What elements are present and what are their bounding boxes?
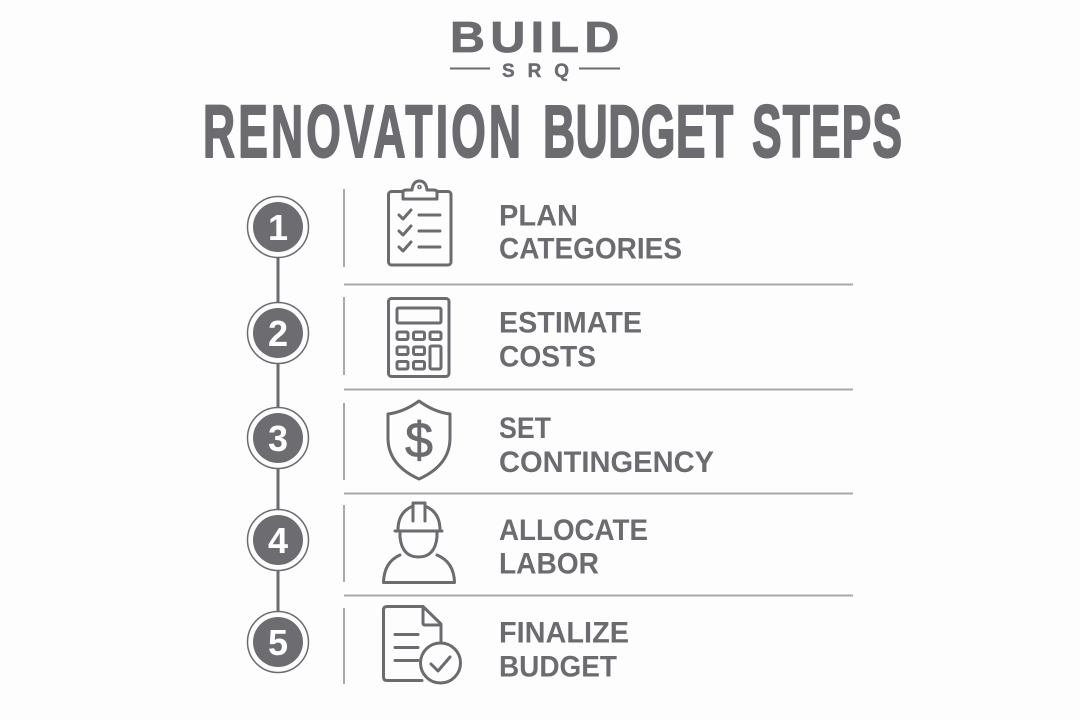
timeline connector bbox=[276, 256, 280, 614]
icon: calculator bbox=[388, 298, 449, 376]
step 4 label: ALLOCATE bbox=[499, 514, 648, 547]
icon: document with check bbox=[384, 606, 460, 683]
step 1 label: PLAN bbox=[499, 200, 578, 232]
step 1 number badge: 1 bbox=[268, 207, 288, 248]
step 3 number badge: 3 bbox=[268, 418, 288, 459]
step 2 number badge: 2 bbox=[268, 313, 288, 354]
step 4 number badge bbox=[248, 510, 308, 570]
step 2 label bbox=[499, 306, 642, 374]
step 5 label: BUDGET bbox=[499, 650, 617, 684]
step 5 label bbox=[499, 616, 629, 684]
step 5 label: FINALIZE bbox=[499, 616, 629, 650]
step 2 label: ESTIMATE bbox=[499, 306, 642, 340]
step 3 label: CONTINGENCY bbox=[499, 446, 714, 479]
icon: shield with dollar: $ bbox=[405, 412, 433, 468]
step 1 label: CATEGORIES bbox=[499, 232, 682, 266]
step 2 label: COSTS bbox=[499, 340, 596, 374]
step 4 label bbox=[499, 514, 648, 580]
title bbox=[203, 90, 902, 173]
icon: construction worker bbox=[384, 503, 454, 582]
step 1 number badge bbox=[248, 196, 308, 258]
icon: clipboard checklist bbox=[388, 181, 451, 265]
logo: Build SRQ: SRQ bbox=[502, 61, 569, 82]
step 4 label: LABOR bbox=[499, 548, 599, 580]
step 2 number badge bbox=[248, 302, 308, 364]
icon: shield with dollar bbox=[388, 401, 450, 479]
step 3 label: SET bbox=[499, 412, 551, 445]
step 1 label bbox=[499, 200, 682, 266]
title: BUDGET bbox=[543, 90, 733, 173]
logo: Build SRQ: BUILD bbox=[450, 12, 619, 62]
title: STEPS bbox=[752, 90, 902, 173]
step 5 number badge bbox=[248, 612, 308, 672]
step 5 number badge: 5 bbox=[268, 622, 288, 663]
step 3 number badge bbox=[248, 408, 308, 468]
title: RENOVATION bbox=[203, 90, 521, 173]
step 3 label bbox=[499, 412, 714, 479]
step 4 number badge: 4 bbox=[268, 520, 288, 561]
